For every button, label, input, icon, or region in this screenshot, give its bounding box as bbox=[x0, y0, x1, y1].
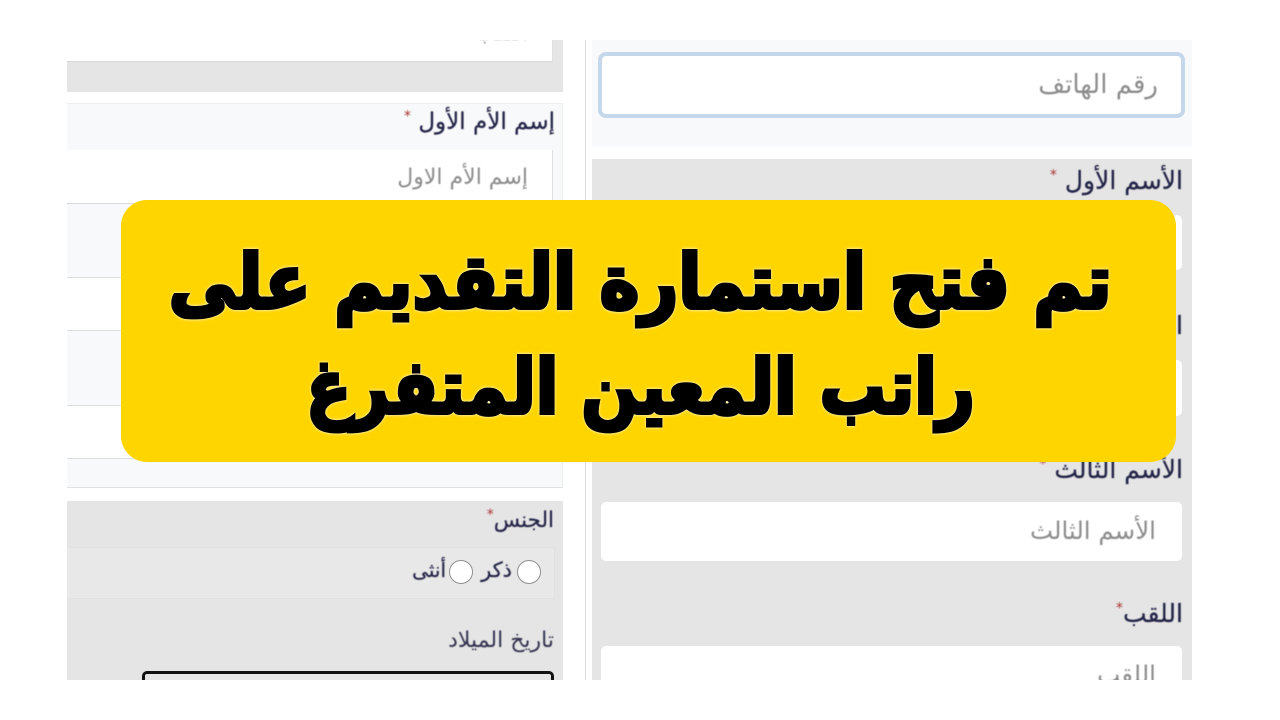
input: mother's first name bbox=[67, 150, 553, 204]
input: top cropped field bbox=[67, 40, 553, 62]
radio: female bbox=[449, 560, 473, 584]
input: phone number bbox=[598, 52, 1185, 118]
section: phone bbox=[592, 40, 1192, 147]
top gray section bbox=[67, 40, 563, 92]
input: third name bbox=[601, 502, 1182, 561]
label: mother's first name: إسم الأم الأول * bbox=[404, 108, 555, 135]
section: gender and birth date bbox=[67, 501, 563, 680]
placeholder: mother's first name: إسم الأم الاول bbox=[397, 165, 528, 190]
label: first name: الأسم الأول * bbox=[1050, 166, 1183, 195]
radio: male bbox=[517, 560, 541, 584]
input: second name bbox=[601, 360, 1182, 416]
section: mother's name and following fields bbox=[67, 103, 563, 488]
banner: yellow headline panel bbox=[121, 200, 1176, 462]
text: female: أنثى bbox=[412, 558, 446, 582]
placeholder: phone number: رقم الهاتف bbox=[1038, 70, 1158, 100]
panel: right form column bbox=[592, 40, 1192, 680]
text: male: ذكر bbox=[481, 558, 512, 582]
input: second hidden field bbox=[67, 277, 553, 331]
headline: line 1: تم فتح استمارة التقديم على bbox=[169, 238, 1112, 326]
input: first name bbox=[601, 215, 1182, 270]
divider: column edge bbox=[585, 40, 586, 680]
label: second name: الأسم الثاني bbox=[1059, 311, 1183, 340]
label: gender: الجنس* bbox=[487, 507, 554, 533]
label: surname: اللقب* bbox=[1116, 599, 1183, 628]
section: name fields bbox=[592, 159, 1192, 680]
input: third hidden field bbox=[67, 405, 553, 459]
panel: left form column bbox=[67, 40, 563, 680]
input: birth date bbox=[142, 671, 554, 691]
placeholder: third name: الأسم الثالث bbox=[1030, 516, 1156, 545]
group: gender radio options bbox=[67, 547, 555, 599]
label: third name: الأسم الثالث * bbox=[1039, 455, 1183, 484]
input: surname bbox=[601, 646, 1182, 706]
label: birth date: تاريخ الميلاد bbox=[448, 628, 554, 653]
headline: line 2: راتب المعين المتفرغ bbox=[306, 343, 975, 431]
